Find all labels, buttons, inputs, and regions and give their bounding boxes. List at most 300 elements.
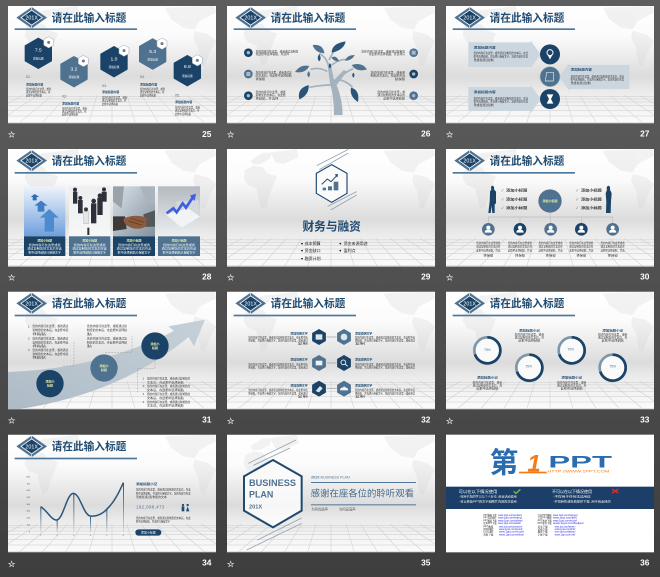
person text 4: 您的内容打在这里或者 [569, 241, 594, 245]
brand logo [490, 448, 612, 480]
person text 4: 择保留 [576, 253, 587, 257]
text block 05: 05. [175, 94, 180, 98]
right text row 2 [355, 356, 415, 370]
middle text list: 制您的文本后，在此框中选择粘 [87, 340, 127, 344]
left text row 3: 添加说明文字 [290, 383, 308, 388]
left text list: 复制您的文本后，在此框中选 [32, 340, 69, 344]
slide header [234, 7, 356, 30]
card 3 caption: 框中选择粘贴只保留文字 [118, 250, 151, 254]
label block 1: 通过复制您的文本后，在 [473, 384, 502, 388]
left text blocks: 在此框中选择粘贴，并选择 [256, 52, 289, 56]
person text 3: 此框中选择粘贴，并选 [539, 249, 563, 253]
right checklist: 添加小标题 [581, 205, 602, 210]
text block 03: 您的内容打在这里，或者 [102, 96, 127, 100]
slide header [453, 150, 575, 174]
x axis labels: 3 [73, 535, 75, 537]
left text row 2 [248, 356, 308, 370]
label block 2: 此框中选择粘贴 [518, 339, 541, 343]
link list: www.1ppt.com/kejian/ [553, 522, 584, 525]
person text 1: 您的内容打在这里或者 [476, 241, 501, 245]
hexagon 8.8 [174, 55, 202, 86]
leaf [351, 88, 358, 102]
curve [41, 483, 123, 520]
text block 03 [102, 84, 127, 106]
link list: www.1ppt.com/powerpoint/ [499, 525, 523, 528]
middle text list: 贴 [87, 344, 92, 348]
hexagon icon row 2 left [312, 355, 326, 371]
hexagon badge [244, 460, 302, 527]
card 2: business people photo [69, 186, 110, 236]
text block 02: 02. [62, 94, 67, 98]
slide number: 28 [202, 272, 212, 282]
left text list [28, 324, 69, 360]
arrow panel top left: 您的内容打在这里，或者通过复制您的文本后，在此 [474, 51, 528, 55]
text block 04: 此框中选择粘贴 [140, 93, 156, 97]
right checklist: 添加小标题 [581, 188, 602, 193]
people icons [182, 504, 189, 511]
link list: EXCEL教程 [483, 530, 494, 534]
hexagon badge: BUSINESS [249, 478, 296, 488]
link list: www.1ppt.com/excel/ [499, 531, 524, 534]
right checklist: ✓ [576, 197, 579, 201]
ring 1 [474, 337, 501, 365]
left text list: 您的内容打在这里，或者通过 [32, 348, 69, 352]
hexagon icon row 3 right [337, 381, 351, 397]
star icon: ☆ [8, 273, 16, 283]
bottom right text list: 1 [143, 376, 145, 380]
arrow panel bottom left: 您的内容打在这里，或者通过复制您的文本后，在此 [474, 96, 528, 100]
star icon: ☆ [227, 417, 235, 427]
left text row 2: 择粘贴，并选择只保留文字。您的内容打在这里，或者通过 [248, 366, 308, 370]
left text list: 择粘贴 [32, 356, 46, 360]
right text row 3: 复制 [355, 395, 366, 399]
slide 30: org chart [387, 149, 660, 284]
middle text list: 您的内容打在这里，或者通过复 [87, 324, 127, 328]
left text list: 1 [28, 324, 30, 328]
connector lines [488, 213, 613, 223]
hexagon icon row 1 right [337, 329, 351, 345]
slide header: 请在此输入标题 [52, 154, 127, 167]
bullet list: 资金缺口 [305, 247, 321, 253]
right text row 1 [355, 330, 415, 346]
slide header: 请在此输入标题 [490, 297, 565, 310]
leaf [332, 41, 346, 53]
label block 4: 此框中选择粘贴 [602, 339, 624, 343]
description heading: 添加标题小记 [136, 481, 157, 486]
right icon 2 [409, 70, 418, 78]
label block 2: 通过复制您的文本后，在 [515, 336, 544, 340]
slide header: 201X [25, 301, 38, 307]
person text 5: 择保留 [608, 253, 618, 257]
hexagon icon row 1 left [312, 329, 326, 345]
person text 5: 通过复制您的文本后在 [601, 245, 625, 249]
left icon 3 [244, 91, 253, 100]
arrow panel bottom left: 框中选择粘贴，并选择只保留文字。您的内容打在这 [474, 100, 528, 104]
right text row 2: 添加说明文字 [355, 356, 372, 361]
bottom right text list [143, 376, 190, 408]
right checklist: ✓ [576, 206, 579, 210]
person text 4: 此框中选择粘贴，并选 [569, 249, 594, 253]
person text 5: 此框中选择粘贴，并选 [601, 249, 625, 253]
x axis labels: 1 [40, 535, 41, 537]
y axis labels: 300 [27, 511, 31, 513]
slide 33: four percentage rings [387, 292, 660, 427]
link list: www.1ppt.com/jiaoan/ [555, 531, 576, 534]
link list: PPT背景图片 [483, 516, 497, 520]
text block 03: 03. [102, 84, 107, 88]
card 2 caption: 您的内容打在这里或者 [74, 243, 106, 247]
text block 04 [140, 75, 165, 97]
card 3 caption: 添加小标题 [127, 238, 141, 243]
slide header: 201X [463, 159, 476, 165]
right text row 3 [355, 383, 415, 399]
left text blocks: 的文本后，在此框中选择粘贴 [256, 74, 292, 78]
link list: 范文下载 [538, 524, 548, 528]
label block 2 [515, 327, 544, 343]
hexagon 8.8: 8.8 [184, 64, 191, 70]
description text lower: 您的内容打在这里，或者通过复制您的文本后，在此 [136, 516, 191, 520]
right icon 1 [409, 48, 418, 57]
hexagon 5.3: 添加标题 [147, 57, 158, 61]
slide header: 请在此输入标题 [271, 11, 346, 24]
slide header: 请在此输入标题 [271, 297, 346, 310]
left text list: 复制您的文本后，在此框中选 [32, 352, 69, 356]
card 3 caption [113, 236, 155, 256]
x axis labels: 6 [123, 535, 125, 537]
text block 04: 添加标题内容 [140, 81, 157, 86]
card 1: blue arrows photo [24, 186, 65, 236]
x axis labels: 5 [106, 535, 108, 537]
person text 1: 此框中选择粘贴，并选 [476, 249, 501, 253]
star icon: ☆ [8, 560, 16, 570]
person text 1: 择保留 [483, 253, 494, 257]
y axis labels: 400 [27, 504, 31, 506]
x axis labels: 2 [56, 535, 58, 537]
big rising arrow [8, 320, 205, 409]
slide number: 29 [421, 272, 431, 282]
arrow panel right: 里或者通过复制 [571, 81, 591, 85]
link list: PPT课件下载 [538, 521, 552, 525]
text block 03: 通过复制您的文本后，在 [102, 99, 127, 103]
bottom right text list: 文本后，在此框中选择粘贴 [147, 404, 184, 408]
subtitle: 201X BUSINESS PLAN [311, 476, 350, 480]
label block 4: 通过复制您的文本后，在 [598, 336, 628, 340]
x axis labels [40, 535, 125, 537]
description text lower [136, 516, 191, 524]
bottom right text list: 您的内容打在这里，或者通过复制您的 [147, 376, 190, 380]
arrow panel right [559, 63, 629, 91]
link list: PPT教程 [483, 524, 494, 528]
slide 26: tree diagram [168, 6, 494, 140]
left text row 2: 您的内容打在这里，或者通过复制您的文本后，在此框中选 [248, 362, 308, 366]
slide number: 35 [421, 558, 431, 568]
label block 4: 添加标题小记 [602, 327, 623, 332]
star icon: ☆ [446, 274, 454, 284]
dashed connectors [63, 336, 155, 393]
hexagon 1.0: 1.0 [111, 57, 118, 63]
left checklist: ✓ [501, 197, 504, 201]
left checklist [501, 188, 528, 210]
milestone circle 1 [36, 370, 64, 397]
person text 1 [476, 241, 501, 257]
left text list: 您的内容打在这里，或者通过 [32, 324, 69, 328]
text block 05: 此框中选择粘贴 [175, 112, 191, 116]
decorative diagonal lines bottom [328, 192, 357, 210]
usage band: -可以修改PPT的文字和图片内容再次使用 [459, 499, 517, 503]
slide header: 201X [244, 301, 257, 307]
star icon: ☆ [8, 416, 16, 426]
left text list: 您的内容打在这里，或者通过 [32, 336, 69, 340]
left text blocks: 择保留 [256, 77, 265, 81]
label block 3: 此框中选择粘贴 [561, 387, 583, 391]
card 4 caption: 您的内容打在这里或者 [163, 243, 195, 247]
y axis labels: 700 [27, 483, 31, 485]
middle text list [87, 324, 127, 348]
left checklist: 添加小标题 [506, 188, 528, 193]
bottom right text list: 您的内容打在这里，或者通过复制您的 [147, 384, 190, 388]
slide header: 请在此输入标题 [52, 440, 127, 453]
right text row 1: 择粘贴，并选择只保留文字。您的内容打在这里，或者通过 [355, 338, 415, 342]
label block 3: 您的内容打在这里，或者 [557, 381, 587, 385]
presenter line: 为何优质声 [311, 507, 329, 512]
hexagon 7.5: 7.5 [35, 48, 42, 54]
arrow panel right: 框中选择粘贴，并选择只保留文字。您的内容打在这 [571, 78, 624, 82]
card 1 caption [24, 236, 65, 256]
left text row 3: 择粘贴，并选择只保留文字。您的内容打在这里，或者通过 [248, 391, 308, 395]
hexagon badge: 201X [249, 505, 262, 511]
milestone circle 2: 标题 [101, 367, 107, 372]
label block 1: 此框中选择粘贴 [476, 387, 499, 391]
left text row 1: 复制 [298, 342, 308, 346]
presenter line [311, 507, 356, 512]
description text lower: 框中选择粘贴，并选择只保留文字 [136, 520, 170, 524]
slide header: 请在此输入标题 [490, 154, 565, 167]
star icon: ☆ [446, 417, 454, 427]
arrow panel right: 添加标题内容 [571, 66, 592, 71]
link list: www.1ppt.com/hangye/ [553, 514, 578, 517]
arrow panel bottom left [468, 85, 541, 113]
slide header: 201X [25, 159, 38, 165]
bottom right text list: 文本后，在此框中选择粘贴 [147, 388, 184, 392]
person text 3: 您的内容打在这里或者 [539, 241, 563, 245]
leaf [318, 54, 321, 61]
slide 36: 1PPT brand page [446, 435, 654, 568]
slide header [15, 293, 137, 316]
y axis labels: 200 [27, 518, 31, 520]
left icon 1 [244, 48, 253, 57]
text block 05: 您的内容打在这里，或者 [175, 106, 200, 110]
arrow panel bottom left: 里或者通过复制 [474, 103, 494, 107]
ring 3 [558, 337, 585, 365]
text block 02 [62, 94, 87, 117]
person text 2: 您的内容打在这里或者 [508, 241, 532, 245]
usage band: 可以在以下情况使用 [459, 488, 497, 494]
ring 2: 75% [525, 365, 532, 369]
right text blocks: 在此框中选择粘贴，并选择只 [369, 52, 405, 56]
left icon 2 [244, 70, 253, 78]
left text blocks: 您的内容打在这里，或者通过复制您 [256, 49, 299, 53]
person text 5 [601, 241, 625, 257]
ring 1: 75% [484, 348, 491, 352]
link list: www.1ppt.com/sucai/ [553, 519, 577, 522]
label block 1: 添加标题小记 [477, 374, 498, 379]
presenter line: 为何显高声 [339, 507, 356, 512]
text block 03: 添加标题内容 [102, 89, 119, 94]
star icon: ☆ [227, 560, 235, 570]
right text blocks: 您的内容打在这里，或者通过复制您 [361, 49, 405, 53]
left text row 3: 复制 [298, 395, 308, 399]
text block 02: 添加标题内容 [62, 101, 79, 106]
hexagon 7.5: 添加标题 [33, 57, 44, 61]
slide header [15, 436, 137, 459]
drop lines [40, 483, 124, 533]
text block 01: 您的内容打在这里，或者 [26, 87, 51, 91]
hexagon 5.3: 5.3 [149, 49, 156, 55]
left checklist: 添加小标题 [506, 205, 528, 210]
right text row 3: 您的内容打在这里，或者通过复制您的文本后，在此框中选 [355, 388, 415, 392]
person node 2 [514, 223, 526, 236]
card 4 caption: 通过复制您的文本后在此 [162, 246, 197, 250]
right text row 1: 添加说明文字 [355, 330, 372, 335]
bullet list: 资金来源用途 [344, 240, 368, 246]
person text 2: 择保留 [515, 253, 525, 257]
right text row 2: 择粘贴，并选择只保留文字。您的内容打在这里，或者通过 [355, 366, 415, 370]
bullet list: 盈利点 [344, 247, 356, 253]
slide 31: rising arrow timeline [0, 292, 275, 426]
link list: www.1ppt.com/word/ [499, 528, 523, 531]
link list: 字体下载 [538, 533, 548, 537]
hexagon 5.3 [140, 38, 167, 69]
person text 3: 通过复制您的文本后在 [539, 245, 563, 249]
middle text list: 制您的文本后，在此框中选择粘 [87, 328, 127, 332]
silhouette right [606, 186, 612, 213]
link list: www.1ppt.com/ziti/ [555, 534, 576, 537]
right checklist: 添加小标题 [581, 196, 602, 201]
left text blocks: 您的内容打在这里，或者 [256, 90, 286, 94]
card 3: handshake photo [113, 186, 155, 236]
description text: 框中选择粘贴，并选择只保留文字。您的内容打在这 [136, 491, 191, 495]
card 1 caption: 通过复制您的文本后在此 [27, 246, 62, 250]
left text list: 择粘贴 [32, 332, 46, 336]
y axis labels: 100 [27, 525, 31, 527]
rule top [311, 482, 416, 483]
hexagon 8.8: 添加标题 [182, 74, 193, 78]
slide number: 31 [202, 414, 212, 424]
big number: 192,098,473 [136, 505, 165, 510]
left text row 1: 您的内容打在这里，或者通过复制您的文本后，在此框中选 [248, 335, 308, 339]
text block 04: 您的内容打在这里，或者 [140, 87, 165, 91]
bottom right text list: 文本后，在此框中选择粘贴 [147, 380, 184, 384]
link list: WORD教程 [483, 527, 494, 531]
label block 3: 通过复制您的文本后，在 [557, 384, 587, 388]
person text 5: 您的内容打在这里或者 [601, 241, 625, 245]
link list: 优秀PPT下载 [483, 521, 497, 525]
link list [483, 513, 584, 537]
link list: 试卷下载 [538, 527, 548, 531]
text block 02: 您的内容打在这里，或者 [62, 106, 87, 110]
right checklist [576, 188, 602, 210]
text block 01 [26, 75, 51, 97]
silhouette left [488, 186, 496, 213]
right icon 3 [409, 91, 418, 100]
label block 1 [473, 374, 502, 391]
left text list: 3 [28, 348, 30, 352]
slide header [453, 293, 575, 316]
link list: 行业PPT模板 [538, 513, 552, 517]
person text 3 [539, 241, 563, 257]
text block 01: 通过复制您的文本后，在 [26, 90, 51, 94]
left text list: 择粘贴 [32, 344, 46, 348]
leaf [295, 66, 309, 72]
slide number: 27 [640, 129, 650, 139]
arrow panel top left: 框中选择粘贴，并选择只保留文字。您的内容打在这 [474, 54, 528, 58]
card 3 caption: 通过复制您的文本后在此 [117, 246, 152, 250]
hexagon badge: PLAN [249, 490, 273, 500]
card 2 caption: 框中选择粘贴只保留文字 [73, 250, 106, 254]
bottom right text list: 4 [143, 400, 145, 404]
x axis labels: 4 [90, 535, 92, 537]
person node 5 [606, 223, 619, 236]
milestone circle 3: 添加小 [151, 341, 159, 346]
slide number: 30 [640, 272, 650, 282]
bottom right text list: 您的内容打在这里，或者通过复制您的 [147, 400, 190, 404]
left text row 1 [248, 330, 308, 346]
bullet list: 成本预算 [305, 240, 321, 246]
link list: 资料下载 [483, 533, 494, 537]
right text blocks: 通过复制您的文本后在 [377, 93, 405, 97]
ring 2 [516, 355, 543, 383]
person text 2 [508, 241, 532, 257]
star icon: ☆ [446, 130, 454, 140]
link list: www.1ppt.com/beijing/ [498, 517, 522, 520]
slide header [15, 150, 137, 174]
connector lines [327, 337, 337, 389]
label block 1: 您的内容打在这里，或者 [473, 381, 502, 385]
bottom right text list: 2 [143, 384, 145, 388]
pill button [135, 529, 161, 536]
rule bottom [311, 504, 416, 505]
left checklist: ✓ [501, 206, 504, 210]
middle text list: 贴 [87, 332, 92, 336]
hexagon finance icon [316, 165, 347, 202]
y axis labels: 600 [27, 490, 31, 492]
right text blocks: 您的内容打在这里，或者通 [371, 71, 405, 75]
hexagon icon row 3 left [312, 381, 326, 397]
card 3 caption: 您的内容打在这里或者 [118, 243, 150, 247]
leaf [329, 63, 331, 68]
brand logo: 1 [527, 451, 541, 478]
label block 3: 添加标题小记 [561, 374, 582, 379]
description text: 里或者通过复制您的文本 [136, 495, 167, 499]
brand logo: 第 [490, 448, 518, 480]
right text row 3: 添加说明文字 [355, 383, 372, 388]
label block 4: 您的内容打在这里，或者 [598, 333, 628, 337]
description text: 您的内容打在这里，或者通过复制您的文本后，在此 [136, 488, 191, 492]
text block 05: 添加标题内容 [175, 99, 192, 104]
person text 4: 通过复制您的文本后在 [569, 245, 594, 249]
card 2 caption: 添加小标题 [82, 238, 97, 243]
slide 34: curve chart [0, 435, 275, 570]
person text 2: 通过复制您的文本后在 [508, 245, 532, 249]
tree [295, 41, 367, 115]
text block 02: 通过复制您的文本后，在 [62, 109, 87, 113]
bullet list [301, 240, 368, 261]
text block 01: 添加标题内容 [26, 81, 43, 86]
ring 4 [599, 355, 626, 383]
link list: PPT图表下载 [483, 518, 497, 522]
decorative diagonal lines [247, 440, 302, 550]
right text blocks: 贴保留 [395, 77, 405, 81]
